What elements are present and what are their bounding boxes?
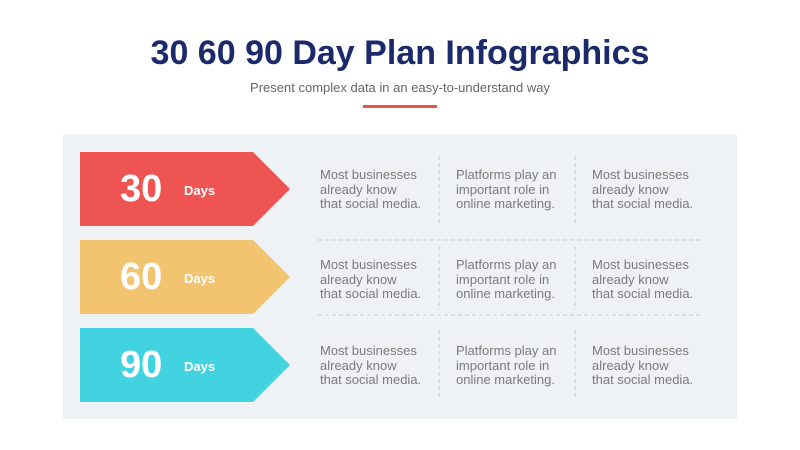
arrow: 60 days: 60 [120,256,162,298]
row 3 texts: important role in [456,358,549,372]
row 2 texts [320,257,693,301]
row 1 texts: that social media. [320,196,421,211]
row 2 texts: Most businesses [320,257,417,272]
row 1 texts: already know [592,182,669,196]
arrow: 30 days: Days [184,183,215,198]
row 3 texts: Platforms play an [456,343,556,358]
row 2 texts: Platforms play an [456,257,556,272]
row 3 texts: Most businesses [592,343,689,358]
row 1 texts: Most businesses [320,167,417,182]
arrow: 90 days: 90 [120,344,162,386]
row 1 texts: online marketing. [456,196,555,211]
row 2 texts: that social media. [320,286,421,301]
row 2 texts: already know [320,272,397,286]
row 3 texts: online marketing. [456,372,555,387]
row 3 texts: already know [320,358,397,372]
subtitle: Present complex data in an easy-to-understand way [250,80,550,95]
row 3 texts [320,343,693,387]
arrow: 30 days [80,152,290,226]
panel [63,134,737,419]
row 2 texts: online marketing. [456,286,555,301]
arrow: 60 days [80,240,290,314]
arrow: 30 days: 30 [120,168,162,210]
row 1 texts: that social media. [592,196,693,211]
row 1 texts: Most businesses [592,167,689,182]
row 1 texts [320,167,693,211]
row 2 texts: important role in [456,272,549,286]
row 1 texts: already know [320,182,397,196]
accent line [363,105,437,108]
title: 30 60 90 Day Plan Infographics [151,34,649,72]
arrow: 90 days: Days [184,359,215,374]
row 3 texts: Most businesses [320,343,417,358]
row 3 texts: that social media. [320,372,421,387]
row 2 texts: that social media. [592,286,693,301]
row 3 texts: that social media. [592,372,693,387]
row 1 texts: important role in [456,182,549,196]
row 2 texts: Most businesses [592,257,689,272]
arrow: 90 days [80,328,290,402]
row 2 texts: already know [592,272,669,286]
row 3 texts: already know [592,358,669,372]
row 1 texts: Platforms play an [456,167,556,182]
arrow: 60 days: Days [184,271,215,286]
